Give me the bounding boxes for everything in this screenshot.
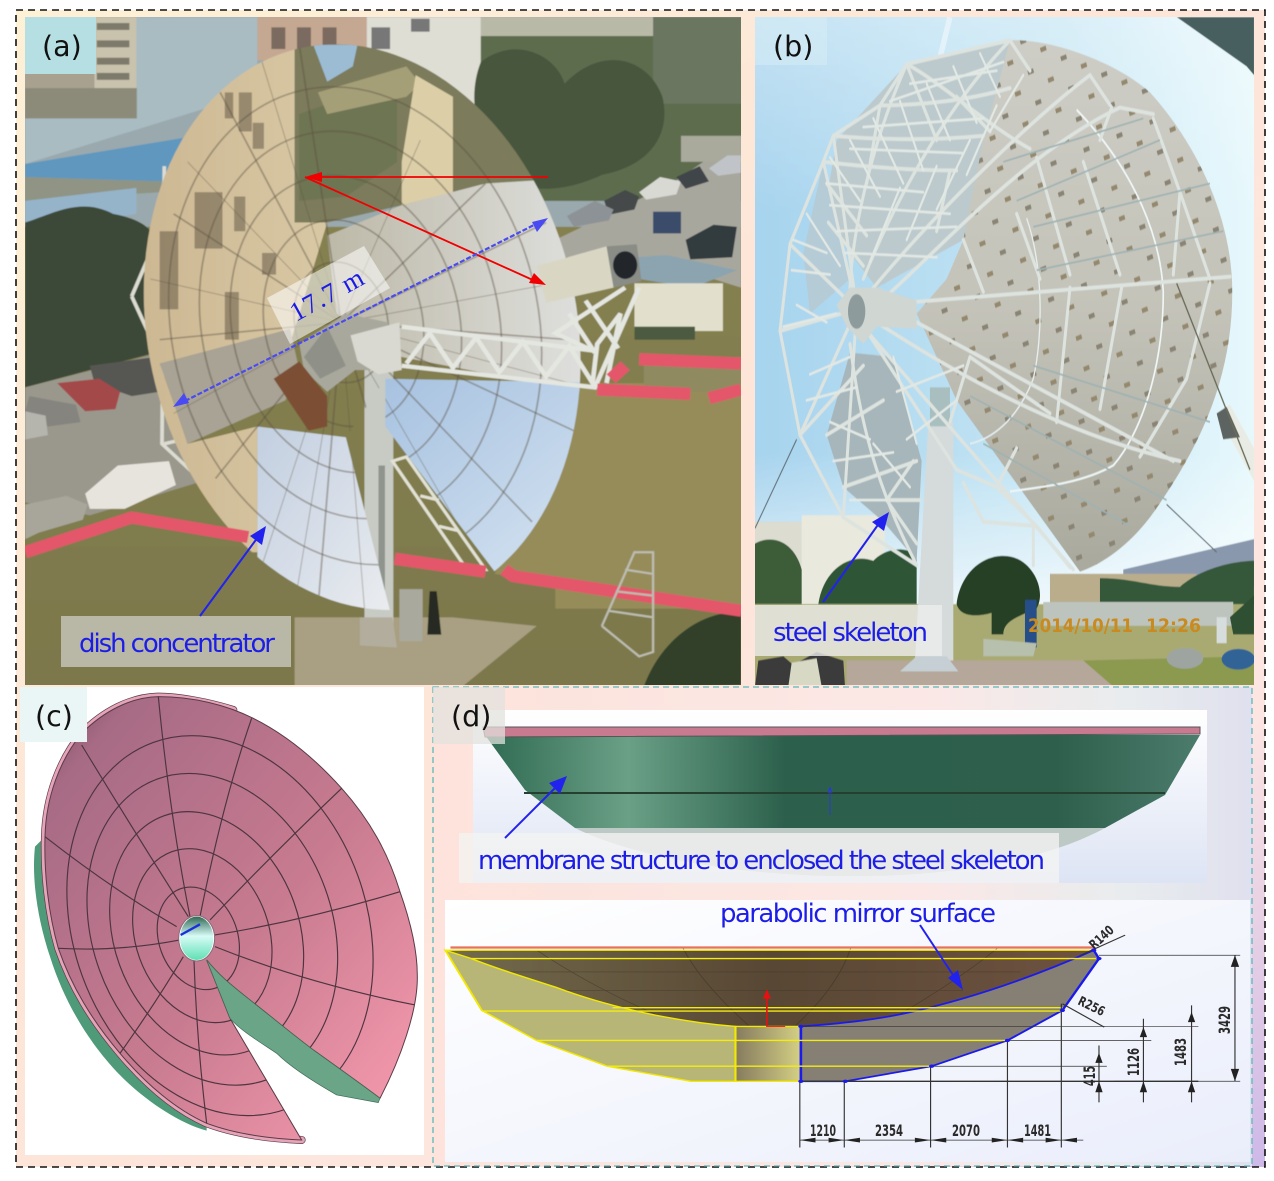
arrow: to steel skeleton: [823, 512, 889, 602]
pink rim highlight: [45, 697, 302, 1140]
white ring on plates: [1010, 110, 1163, 491]
red axes: [767, 990, 785, 1026]
label: (b): (b): [773, 30, 813, 63]
dimension labels: 3429: [1215, 1006, 1234, 1034]
upper lattice bracing: [783, 53, 1023, 500]
pylon: [364, 370, 393, 630]
arrow: focal ray to receiver: [305, 177, 546, 285]
dimension lines: [800, 935, 1240, 1147]
grey right body: [801, 950, 1099, 1081]
timestamp: 12:26: [1146, 615, 1201, 637]
horizon buildings and trees: [755, 521, 802, 569]
label backing: 17.7 m: [267, 246, 390, 344]
label: (a): (a): [42, 30, 82, 63]
label: (c): (c): [35, 700, 73, 733]
central hub: [179, 916, 215, 961]
pylon: [915, 422, 953, 661]
pink mirror surface: [45, 697, 417, 1140]
center column: [735, 1026, 801, 1081]
label: dish concentrator: dish concentrator: [79, 629, 275, 659]
green membrane body: [485, 735, 1200, 828]
arrow: to parabolic mirror surface: [920, 925, 963, 990]
stair scaffold: [602, 552, 653, 656]
dimension labels: 1483: [1171, 1038, 1190, 1066]
dimension labels: R140: [1087, 923, 1117, 953]
mirror grid: [129, 45, 583, 609]
panel: (c) CAD model of dish: [15, 687, 424, 1159]
dimension labels: 1481: [1024, 1121, 1051, 1140]
red fences: [25, 359, 742, 611]
pink rim: [45, 697, 302, 1140]
label backing: dish concentrator: [61, 616, 291, 667]
label: parabolic mirror surface: parabolic mirror surface: [720, 899, 996, 929]
photo scene (a): [20, 10, 751, 691]
dimension labels: 2070: [952, 1121, 980, 1140]
brown mirror interior: [445, 950, 1094, 1026]
pink top rim: [483, 727, 1200, 737]
dimension labels: 1126: [1124, 1048, 1143, 1076]
people: [755, 652, 845, 687]
shaded area behind upper truss: [823, 40, 1010, 288]
panel: (a) photograph of dish concentrator: [20, 10, 751, 691]
dimension labels: 2354: [875, 1121, 903, 1140]
bottom of membrane: [575, 828, 1105, 876]
back plates: [916, 40, 1232, 572]
hub: [837, 288, 917, 344]
dimension text: 17.7 m: 17.7 m: [284, 262, 369, 327]
steel truss: [780, 40, 1230, 569]
dish rear support struts: [129, 165, 190, 472]
arrow: to dish concentrator: [200, 526, 266, 616]
mirror grid lines: [45, 697, 414, 1123]
label: membrane structure: membrane structure to enclosed the steel skeleton: [478, 846, 1045, 876]
panel: (d) dish cross sections: [433, 687, 1252, 1166]
shaded area behind lower truss: [827, 353, 922, 561]
outer green back shell: [34, 837, 207, 1131]
cables: [755, 439, 1217, 552]
dish mirror sectors: [143, 44, 582, 610]
photo scene (b): [750, 10, 1270, 691]
cars: [25, 155, 741, 539]
timestamp: 2014/10/11: [1028, 615, 1133, 637]
yellow left body: [445, 950, 735, 1081]
label: steel skeleton: steel skeleton: [773, 618, 928, 648]
arrow: diameter dimension: [173, 218, 548, 407]
slit green edge: [207, 960, 380, 1103]
crane: [1177, 17, 1254, 75]
house: [638, 255, 736, 284]
dimension arrowheads: [800, 955, 1239, 1142]
label backing: steel skeleton: [755, 605, 942, 656]
panel: (b) photograph of steel skeleton: [750, 10, 1270, 691]
receiver camera: [537, 246, 614, 302]
arrow: focal ray horizontal: [305, 172, 548, 182]
label backing: membrane structure: [459, 833, 1059, 883]
label: (b): [755, 17, 827, 65]
lower view: parabolic section drawing: [445, 900, 1250, 1162]
dimension labels: R256: [1075, 994, 1107, 1020]
truss arm: [402, 288, 639, 387]
label: (a): [25, 17, 96, 74]
dimension labels: [810, 923, 1234, 1140]
dish model (c): [15, 692, 424, 1159]
upper view: membrane structure: [473, 710, 1207, 883]
label: (d): [433, 687, 505, 744]
dimension labels: 1210: [810, 1121, 836, 1140]
label: (c): [20, 687, 87, 742]
dimension labels: 415: [1080, 1066, 1099, 1086]
arrow: to membrane: [505, 776, 567, 838]
label: (d): (d): [451, 700, 491, 733]
section lines: [445, 950, 1099, 1066]
hub: [299, 314, 397, 392]
blue vertices: [798, 949, 1102, 1083]
